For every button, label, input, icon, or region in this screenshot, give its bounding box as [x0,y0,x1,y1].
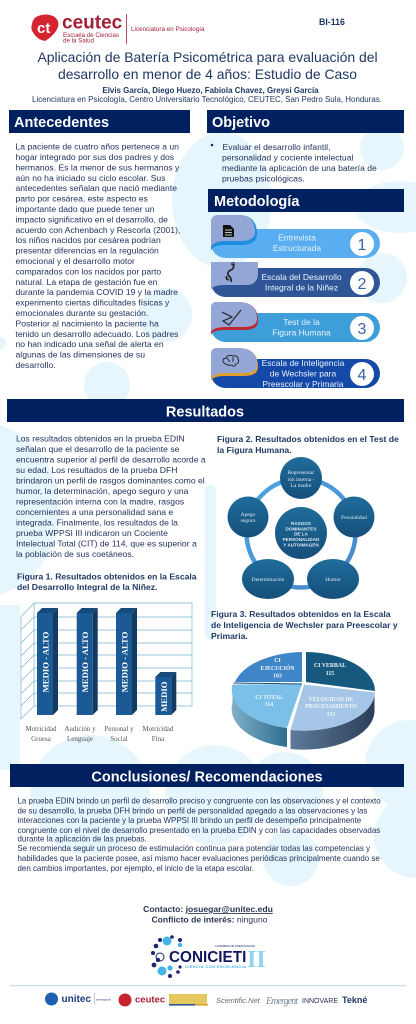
text: antecedentes: aún no ha iniciado su ciclo escolar. Sus [16,173,166,183]
text: antecedentes: hermanos. Es la menor de sus hermanos y [16,162,180,172]
text: antecedentes: La paciente de cuatro años pertenece a un [16,142,179,152]
heading: Conclusiones: Conclusiones/ Recomendaciones [91,770,323,786]
text: antecedentes: desarrollo. [16,360,56,370]
step label: Escala del Desarrollo [261,272,342,282]
icon: brain [223,355,239,366]
logo dots [151,935,182,978]
logo: ceutec small: ceutec [135,994,165,1006]
axis labels: Audición y [64,725,96,733]
slice: verbal [306,652,375,691]
heading: Metodología: Metodología [214,194,300,210]
text: antecedentes: algunas de las dimensiones de su [16,350,145,360]
text: conclusiones: den cambios importantes, por ejemplo, el inicio de la etapa escolar. [18,864,254,873]
heading: Objetivo [207,110,404,133]
text: resultados: representación interna con la madre, rasgos [16,496,184,506]
axis labels: Gruesa [31,735,52,743]
step 4: wechsler: 4 [358,367,367,384]
logo: investigación [94,993,112,1005]
text: resultados [16,434,206,559]
text: resultados: Intelectual Total (CIT) de 114, que es superior a [16,538,197,548]
node: determinación [242,559,294,599]
step 2: escala del desarrollo: Integral de la Niñez [265,282,338,292]
program name: Licenciatura en Psicología [131,26,205,33]
logo: unitec [45,992,91,1006]
step 4: wechsler: de Wechsler para [270,368,336,378]
figure 3 caption: de Inteligencia de Wechsler para Preescolar y [211,620,398,630]
node: center: DE LA [294,532,309,536]
icon: ct badge [31,14,58,41]
step label: Entrevista [278,232,316,242]
node: humor [307,559,359,599]
logo: tekné: Tekné [342,995,367,1005]
axis labels: Fina [152,735,165,743]
slice: ci ejecución: CI [274,658,281,664]
bar chart [21,603,192,743]
text: resultados: integrada. Finalmente, los resultados de la [16,518,178,528]
text: resultados: humor, la determinación, apego seguro y una [16,486,189,496]
text: antecedentes: impacto significativo en el desarrollo, de [16,214,168,224]
text: resultados: Los resultados obtenidos en la prueba EDIN [16,434,185,444]
logo divider [125,14,128,44]
node: apego seguro [228,496,268,538]
step 3: figura humana [211,302,380,342]
text: antecedentes: tenido un desarrollo adecuado. Los padres [16,329,178,339]
slice: ci total: CI TOTAL [255,695,283,701]
slice: velocidad de procesamiento: VELOCIDAD DE [309,697,354,703]
text: conclusiones: congruente con el nivel de desarrollo presentado en la prueba EDIN y con las capacidades observadas [18,826,380,835]
figure 1 caption [17,572,197,592]
step label: Escala de Inteligencia [262,358,345,368]
text: objetivo: personalidad y cociente intelectual [222,152,353,162]
title [37,49,378,82]
text: antecedentes: comparados con los nacidos por parto [16,266,161,276]
logo tagline: CIENCIA CON EXCELENCIA [185,964,246,969]
cycle diagram [228,457,374,599]
figure 3 caption [211,609,398,641]
heading: Resultados [7,399,404,422]
title: desarrollo en menor de 4 años: Estudio de Caso [58,66,357,82]
cycle ring [246,478,356,588]
pie separator [234,683,302,684]
node: apego seguro: seguro [241,518,256,524]
logo event note: CONGRESO DE INVESTIGACIÓN [215,943,255,948]
text: antecedentes: hogar integrado por sus dos padres y dos [16,152,174,162]
bar: motricidad gruesa: MEDIO - ALTO [40,631,50,692]
figure 1 caption: del Desarrollo Integral de la Niñez. [17,582,157,592]
text: resultados: encuentra superior al perfil de desarrollo acorde a [16,454,206,464]
text: antecedentes: antecedentes señalan que nació mediante [16,183,177,193]
authors: Elvis García, Diego Huezo, Fabiola Chavez, Greysi García [102,86,319,95]
text: resultados: brindaron un perfil de rasgos dominantes como el [16,476,205,486]
text: antecedentes: importante dado que puede tener un [16,204,155,214]
step number [350,316,374,340]
slice: verbal: 115 [326,671,334,677]
affiliation: Licenciatura en Psicología, Centro Universitario Tecnológico, CEUTEC, San Pedro Sula, Honduras. [32,95,382,104]
logo numeral: II [247,947,266,973]
chart grid [21,603,192,719]
logo name: CONICIETI [169,949,246,966]
logo: innovare: INNOVARE [302,998,338,1005]
text: antecedentes: emocionales durante su gestación. [16,308,148,318]
text: antecedentes: no han indicado una señal de alerta en [16,339,164,349]
bar: audición y lenguaje [77,608,98,715]
step 1: entrevista: 1 [358,237,367,254]
title: Aplicación de Batería Psicométrica para evaluación del [37,49,378,65]
logo wordmark: ct [37,20,50,37]
axis labels: Lenguaje [67,735,93,743]
bar: personal y social [116,608,137,715]
node: determinación: Determinación [252,577,285,583]
heading: Antecedentes [9,110,190,133]
conflict of interest: Conflicto de interés: ninguno [151,914,268,924]
pie side: velocidad [290,692,374,750]
slice: ci total: 114 [265,702,273,708]
text: antecedentes: durante la pandemia COVID 19 y la madre [16,287,178,297]
text: conclusiones: La prueba EDIN brindo un perfil de desarrollo preciso y congruente con las observaciones y el contexto [18,796,381,806]
footer rule [10,985,406,986]
text: conclusiones: de su desarrollo, la prueba DFH brindo un perfil de personalidad apegado a las observaciones y las [18,806,367,815]
step number [350,232,374,256]
figure 3 caption: Figura 3. Resultados obtenidos en la Escala [211,609,391,619]
heading: Objetivo: Objetivo [212,115,270,131]
text: conclusiones: Se recomienda seguir un proceso de estimulación continua para potenciar todas las competencias y [18,844,370,853]
node: representación interna: La madre [291,483,312,489]
contact [143,904,273,924]
figure 1 caption: Figura 1. Resultados obtenidos en la Escala [17,572,197,582]
figure 2 caption [217,434,399,455]
bar: motricidad fina: MEDIO [159,681,169,712]
text: antecedentes: acuerdo con Achenbach y Rescorla (2001), [16,225,180,235]
text: antecedentes: experimento ciertas dificultades físicas y [16,298,170,308]
node: center: DOMINANTES [286,526,316,532]
text: objetivo: pruebas psicológicas. [222,174,305,184]
text: conclusiones [18,796,381,873]
slice: verbal: CI VERBAL [314,663,346,669]
node: fecundidad: Fecundidad [341,515,367,521]
slice: velocidad de procesamiento [290,684,375,731]
heading: Metodología [208,189,404,212]
text: antecedentes: natural. La etapa de gestación fue en [16,277,158,287]
figure 2 caption: la Figura Humana. [217,445,292,455]
text: antecedentes: parto por cesárea, este aspecto es [16,194,148,204]
text: objetivo: Evaluar el desarrollo infantil, [222,142,330,152]
node: representación interna [280,457,322,499]
text: conclusiones: interacciones con la paciente y la prueba WPPSI III brindo un perfil de desempeño principalmente [18,816,362,825]
logo name: ceutec [62,12,123,34]
bar: personal y social: MEDIO - ALTO [120,631,130,692]
text: objetivo: mediante la aplicación de una batería de [222,163,377,173]
axis labels: Social [110,735,128,743]
step 4: wechsler [211,348,380,389]
axis labels: Personal y [104,725,134,733]
node: center: RASGOS [291,521,311,526]
text: resultados: la población de sus coetáneos. [16,549,134,559]
axis labels: Motricidad [142,725,174,733]
text: antecedentes: Posterior al nacimiento la paciente ha [16,318,159,328]
contact: Contacto: josuegar@unitec.edu [143,904,273,914]
node: center: PERSONALIDAD [283,537,320,542]
step 3: figura humana: Figura Humana [272,328,331,338]
step 1: entrevista: Estructurada [273,243,321,253]
text: antecedentes: presentar diferencias en la regulación [16,246,159,256]
slice: ci total [232,684,302,728]
node: humor: Humor [325,577,341,583]
bar: audición y lenguaje: MEDIO - ALTO [80,631,90,692]
logo: emergent: Emergent [265,996,298,1007]
logo: unitec: unitec [62,994,91,1005]
logo: yellow mark [169,994,208,1006]
text: antecedentes: los niños nacidos por cesárea podrían [16,235,161,245]
node: center: Y AUTOIMAGEN [283,542,319,548]
figure 2 caption: Figura 2. Resultados obtenidos en el Test de [217,434,399,444]
step 4: wechsler: Preescolar y Primaria [262,379,344,389]
axis labels: Motricidad [25,725,57,733]
text: conclusiones: habilidades que la paciente posee, así mismo hacer evaluaciones periódicas principalmente cuando se [18,854,380,863]
axis labels [25,725,174,743]
step 3: figura humana: 3 [358,321,367,338]
logo: ceutec [31,12,205,45]
pie side: total [232,685,287,747]
background blobs [0,126,416,886]
text: resultados: concernientes a una personalidad sana e [16,507,173,517]
step number [350,271,374,295]
heading: Conclusiones [10,764,404,787]
node: apego seguro: Apego [241,512,256,518]
text: antecedentes [16,142,180,370]
step label: Test de la [283,317,320,327]
step number [350,362,374,386]
step 2: escala del desarrollo: 2 [358,276,367,293]
text: antecedentes: emocional y el desarrollo motor [16,256,135,266]
slice: ci ejecución: EJECUCIÓN [260,664,295,672]
poster code: BI-116 [319,17,345,27]
slice: ci ejecución: 103 [273,674,282,680]
heading: Antecedentes: Antecedentes [14,115,109,131]
text: objetivo [211,142,377,184]
icon: document [223,225,234,237]
logo: conicieti [151,935,266,978]
pie chart [232,652,375,750]
sponsor logos [45,992,367,1007]
node: representación interna: Representac [288,470,315,476]
logo subtitle line 2: de la Salud [63,38,95,45]
text: resultados: prueba WPPSI III indicaron un Cociente [16,528,168,538]
bar: motricidad gruesa [37,608,58,715]
icon: stethoscope [226,264,234,282]
bar: motricidad fina [155,672,176,715]
heading: Resultados: Resultados [166,404,244,420]
node: center [275,507,327,559]
figure 3 caption: Primaria. [211,631,248,641]
icon: figure drawing [222,310,241,325]
logo: ceutec small [118,994,165,1006]
text: resultados: señalan que el desarrollo de la paciente se [16,444,180,454]
step 1: entrevista [211,215,380,258]
slice: ci ejecución [235,652,302,682]
slice: velocidad de procesamiento: PROCESAMIENTO [305,704,357,710]
text: conclusiones: durante la aplicación de las pruebas. [18,834,147,844]
node: fecundidad [334,496,374,538]
slice: velocidad de procesamiento: 131 [327,712,335,718]
node: representación interna: ión interna - [288,477,315,483]
text: resultados: su edad. Los resultados de la prueba DFH [16,465,177,475]
logo: scientific net: Scientific.Net [216,996,261,1005]
logo subtitle: Escuela de Ciencias [63,32,119,39]
step 2: escala del desarrollo [211,262,380,297]
logo: investigación: investigación [96,998,112,1002]
